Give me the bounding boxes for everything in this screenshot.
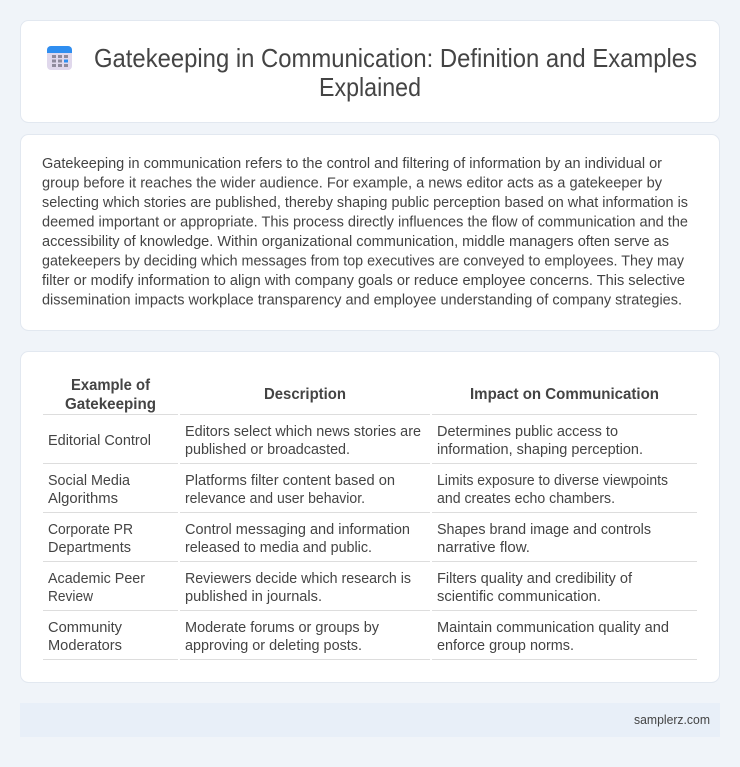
text block: definition paragraph: dissemination impacts workplace transparency and employee understanding of company strategies.: [42, 292, 682, 308]
table row: community moderators: enforce group norms.: [437, 638, 574, 654]
text block: definition paragraph: accessibility of knowledge. Within organizational communication, middle managers often serve as: [42, 234, 669, 250]
table row: social media algorithms: and creates echo chambers.: [437, 491, 615, 507]
panel: definition text: [20, 134, 720, 330]
text block: definition paragraph: filter or modify information to align with company goals or reduce employee concerns. This selective: [42, 273, 685, 289]
table row: community moderators: [48, 620, 669, 654]
table row: academic peer review: Review: [48, 589, 94, 605]
table header: Description: [264, 386, 346, 403]
text block: definition paragraph: selecting which stories are published, thereby shaping public perception based on what information is: [42, 195, 688, 211]
table row: academic peer review: Academic Peer: [48, 571, 145, 587]
text block: definition paragraph: [42, 156, 688, 308]
table row: social media algorithms: relevance and user behavior.: [185, 491, 365, 507]
footer bar: samplerz.com: [634, 712, 710, 727]
table row: community moderators: Community: [48, 620, 123, 636]
table row: corporate PR departments: narrative flow.: [437, 540, 530, 556]
table row: academic peer review: scientific communication.: [437, 589, 601, 605]
table row: social media algorithms: Platforms filter content based on: [185, 473, 395, 489]
table row: academic peer review: published in journals.: [185, 589, 322, 605]
table row: academic peer review: Filters quality and credibility of: [437, 571, 633, 587]
table row: corporate PR departments: Departments: [48, 540, 131, 556]
table header: Gatekeeping: [65, 396, 156, 413]
text block: definition paragraph: gatekeepers by deciding which messages from top executives are conveyed to employees. They may: [42, 254, 685, 270]
table header: Example of: [71, 377, 151, 394]
table row: editorial control: Determines public access to: [437, 424, 618, 440]
table row: community moderators: Moderators: [48, 638, 122, 654]
table row: corporate PR departments: Corporate PR: [48, 522, 133, 538]
table row: community moderators: Maintain communication quality and: [437, 620, 669, 636]
table row: editorial control: Editors select which news stories are: [185, 424, 421, 440]
table row: community moderators: Moderate forums or groups by: [185, 620, 380, 636]
table row: academic peer review: [48, 571, 633, 605]
text block: definition paragraph: deemed important or appropriate. This process directly influences the flow of communication and the: [42, 214, 688, 230]
table row: social media algorithms: Algorithms: [48, 491, 118, 507]
table row: editorial control: Editorial Control: [48, 433, 151, 449]
table row: editorial control: information, shaping perception.: [437, 442, 643, 458]
footer bar: [20, 703, 720, 737]
table row: corporate PR departments: released to media and public.: [185, 540, 372, 556]
panel: examples table: [20, 352, 720, 682]
icon: calendar: [47, 46, 72, 70]
table row: community moderators: approving or deleting posts.: [185, 638, 362, 654]
table header: Impact on Communication: [470, 386, 659, 403]
table row: social media algorithms: Limits exposure to diverse viewpoints: [437, 473, 668, 489]
title: Explained: [319, 74, 421, 102]
table row: social media algorithms: [48, 473, 668, 507]
table row: corporate PR departments: [48, 522, 651, 556]
table row: corporate PR departments: Shapes brand image and controls: [437, 522, 651, 538]
table row: editorial control: [48, 424, 643, 458]
text block: definition paragraph: Gatekeeping in communication refers to the control and filtering of information by an individual or: [42, 156, 662, 172]
text block: definition paragraph: group before it reaches the wider audience. For example, a news editor acts as a gatekeeper by: [42, 176, 663, 192]
table row: editorial control: published or broadcasted.: [185, 442, 350, 458]
table header: [65, 377, 659, 413]
table row: corporate PR departments: Control messaging and information: [185, 522, 410, 538]
title: Gatekeeping in Communication: Definition and Examples: [94, 45, 697, 73]
table row: academic peer review: Reviewers decide which research is: [185, 571, 411, 587]
table row: social media algorithms: Social Media: [48, 473, 130, 489]
panel: title header: [20, 20, 720, 122]
title: [94, 45, 697, 102]
